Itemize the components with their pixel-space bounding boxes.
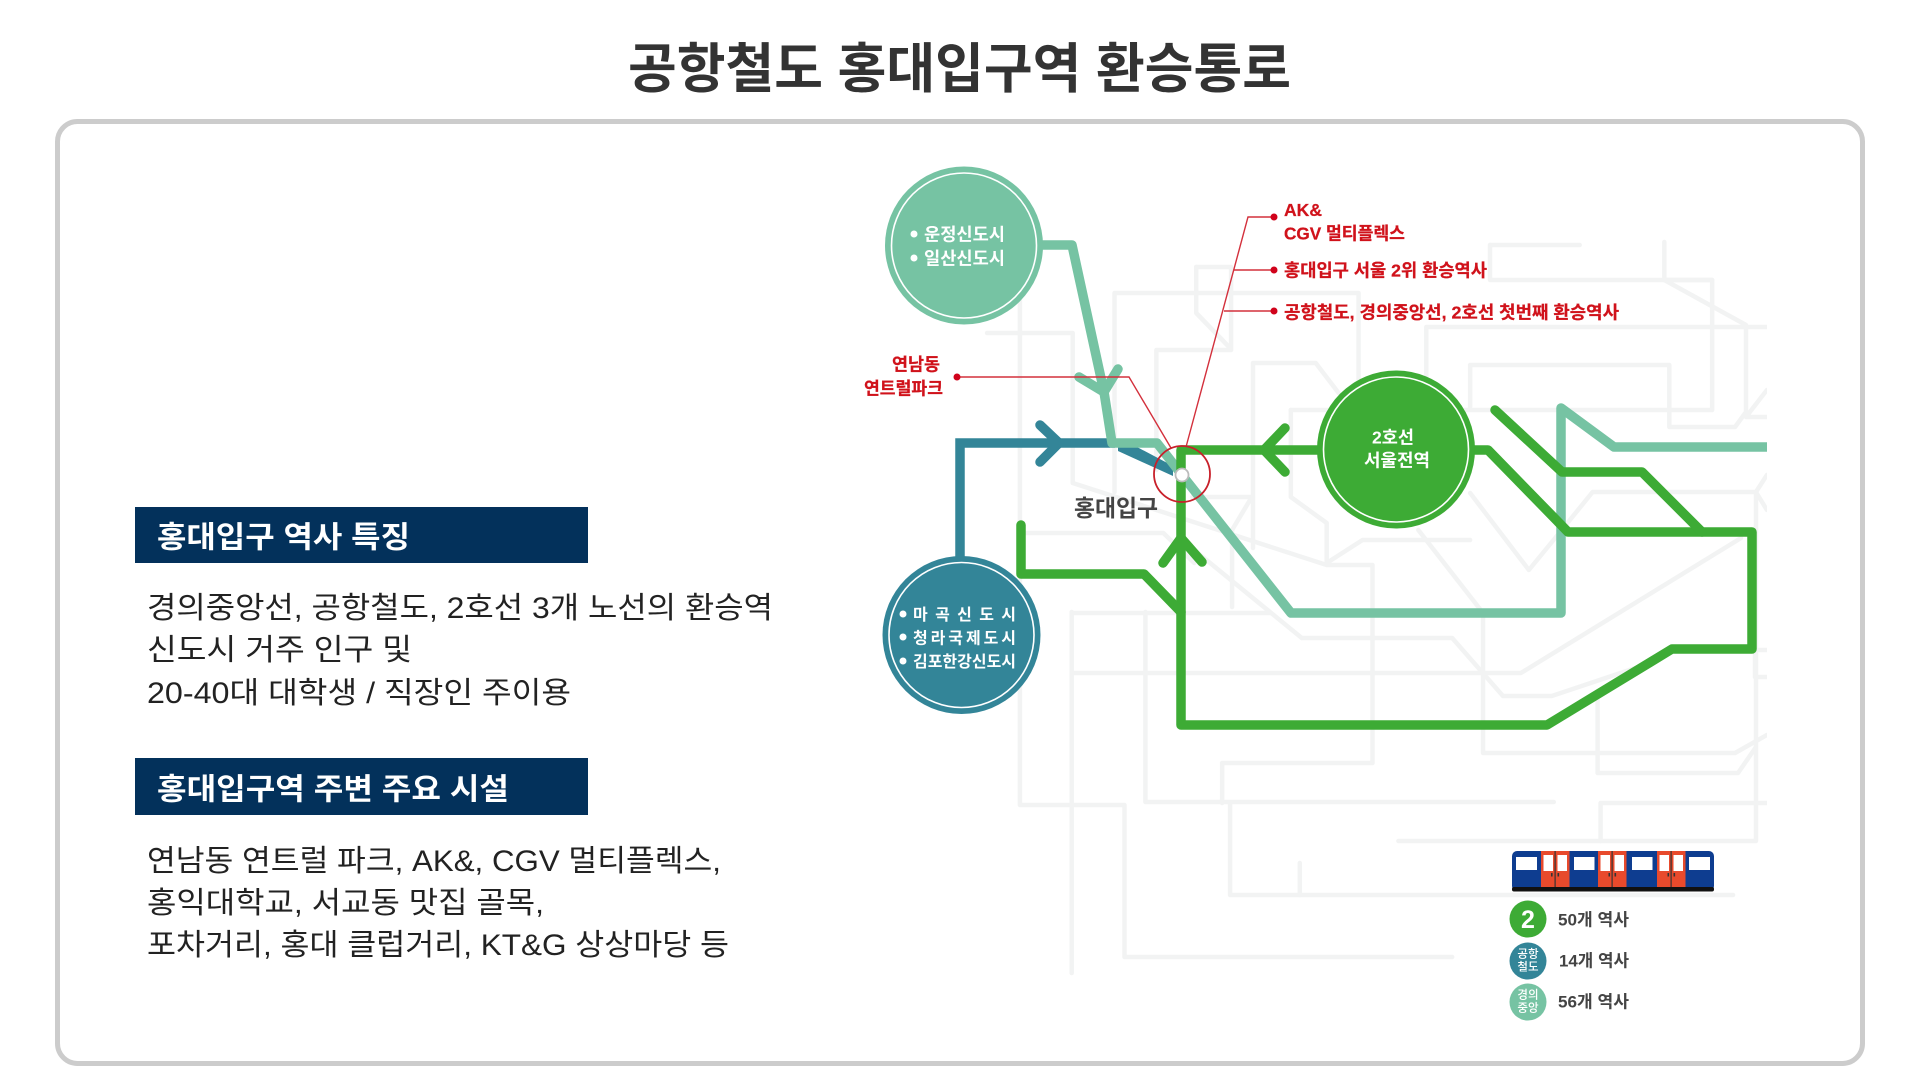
panel: station features [135,507,773,710]
heading: station features [135,507,588,563]
legend item: gyeongui-jungang [1510,984,1629,1020]
circle: line 2: 2호선 [1372,428,1414,448]
background network lines [987,242,1767,973]
callout: yeonnam-dong park [864,354,960,398]
panel: nearby facilities [135,758,729,962]
line: line 2 [1021,410,1752,725]
text block: station features: 신도시 거주 인구 및 [147,634,412,667]
circle: line 2: 서울전역 [1364,450,1430,470]
text block: station features: 20-40대 대학생 / 직장인 주이용 [147,677,571,710]
legend item: line 2 [1510,900,1629,938]
station marker: hongik univ. [1154,446,1210,502]
circle: new towns west: 김포한강신도시 [913,653,1016,671]
callout: AK&amp; CGV: CGV 멀티플렉스 [1284,224,1405,244]
arrow: gyeongui-jungang direction [1079,369,1118,392]
icon: train [1512,851,1714,892]
text block: nearby facilities: 포차거리, 홍대 클럽거리, KT&G 상상마당 등 [147,929,729,962]
circle: new towns north: 일산신도시 [924,248,1005,268]
legend item: airport railroad [1510,942,1629,980]
circle: new towns west: 청라국제도시 [913,630,1016,648]
callout: AK&amp; CGV: AK& [1284,200,1322,220]
line: gyeongui-jungang [1020,245,1767,613]
label: station name: 홍대입구 [1074,495,1158,521]
legend [1510,900,1629,1020]
callout: second busiest: 홍대입구 서울 2위 환승역사 [1284,260,1487,280]
callout: yeonnam-dong park: 연트럴파크 [864,378,943,398]
callout leader lines [957,217,1274,448]
legend item: line 2: 2 [1521,906,1535,934]
legend item: line 2: 50개 역사 [1558,910,1629,930]
callout: first transfer station: 공항철도, 경의중앙선, 2호선 첫번째 환승역사 [1284,302,1619,322]
circle: line 2 [1317,370,1475,528]
heading: station features: 홍대입구 역사 특징 [157,522,410,554]
circle: new towns west: 마 곡 신 도 시 [913,606,1016,624]
title: 공항철도 홍대입구역 환승통로 [628,40,1291,100]
circle: new towns north: 운정신도시 [924,224,1005,244]
chart: subway route map [864,166,1767,973]
text block: nearby facilities: 연남동 연트럴 파크, AK&, CGV 멀티플렉스, [147,845,721,878]
legend item: airport railroad: 14개 역사 [1559,952,1629,970]
callout: AK&amp; CGV [1270,200,1405,244]
text block: station features: 경의중앙선, 공항철도, 2호선 3개 노선의 환승역 [147,592,773,625]
legend item: airport railroad: 철도 [1517,960,1539,974]
legend item: gyeongui-jungang: 중앙 [1517,1002,1539,1014]
heading: nearby facilities [135,758,588,815]
legend item: gyeongui-jungang: 경의 [1517,988,1539,1002]
callout: yeonnam-dong park: 연남동 [892,354,940,374]
arrow: line 2 up direction [1163,538,1202,563]
arrow: airport railroad direction [1040,425,1059,462]
arrow: line 2 left direction [1264,428,1285,472]
text block: nearby facilities: 홍익대학교, 서교동 맛집 골목, [147,887,544,920]
circle: new towns north [885,166,1043,324]
text block: nearby facilities [147,845,729,962]
heading: nearby facilities: 홍대입구역 주변 주요 시설 [157,774,509,806]
line: airport railroad [960,425,1173,560]
line: airport railroad station spur [1118,447,1173,476]
legend item: airport railroad: 공항 [1517,948,1539,960]
circle: new towns west [882,556,1040,714]
legend item: gyeongui-jungang: 56개 역사 [1558,992,1629,1012]
text block: station features [147,592,773,710]
